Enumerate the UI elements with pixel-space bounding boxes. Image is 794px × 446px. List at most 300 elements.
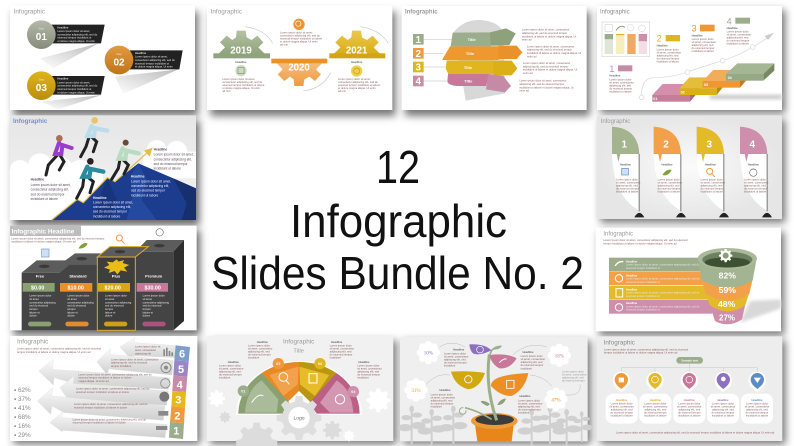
panel: slide 1 steps (10, 5, 198, 116)
flag 1 (612, 127, 644, 217)
headlines text: do eiusmod tempor (219, 373, 242, 377)
right texts: enim ad (527, 54, 537, 58)
card 5: do eiusmod tempor (746, 411, 768, 415)
flag 4: adipiscing elit, sed (744, 183, 766, 187)
card 1: Lorem ipsum dolor (611, 402, 633, 406)
card 5 (741, 394, 773, 424)
panel: slide 7 pricing (10, 226, 200, 335)
feature lists: sed do eiusmod (105, 304, 124, 308)
slide 8 title: Lorem ipsum dolor sit amet, consectetur adipiscing elit, sed do eiusmod (603, 238, 688, 242)
step 03 banner: consectetur adipiscing elit, sed do (57, 84, 98, 88)
step 3 label: do eiusmod tempor (692, 46, 715, 50)
curve and nodes (639, 33, 774, 100)
text 2021: et dolore magna aliqua. Ut enim (338, 86, 376, 90)
step 3 label: incididunt ut labore (692, 49, 714, 53)
leaf orange (491, 373, 528, 396)
flag 1: Lorem ipsum dolor (616, 177, 638, 181)
feature lists: dolore (143, 314, 151, 318)
flag 2: Headline (661, 163, 673, 167)
plant text blocks: Lorem ipsum dolor (431, 392, 453, 396)
icon: grid (235, 65, 247, 76)
mountain text lower: sed do eiusmod tempor (93, 210, 128, 214)
step 02 banner: Headline (135, 51, 147, 55)
flag 1: do eiusmod tempor (616, 186, 639, 190)
percent list: ▪ 41% (14, 405, 31, 412)
flag 4: Lorem ipsum dolor (744, 177, 766, 181)
feature lists: tempor (143, 307, 151, 311)
step 2 label: 2 (657, 34, 662, 44)
card 5: adipiscing elit, sed (746, 408, 768, 412)
step 4 label: Lorem ipsum dolor (727, 30, 749, 34)
panel: slide 4 staircase (597, 6, 785, 113)
plant text blocks: sit amet, consectetur (562, 373, 587, 377)
plant text blocks: adipiscing elit, sed (562, 376, 584, 380)
headlines text: do eiusmod tempor (330, 353, 353, 357)
plant text blocks: sit amet, consectetur (431, 395, 455, 399)
arrow text: eiusmod tempor incididunt ut labore et dolore (73, 421, 126, 425)
step 02 banner: et dolore magna aliqua. Ut enim (135, 65, 173, 69)
headlines text: sit amet, consectetur (219, 367, 244, 371)
flag 3: adipiscing elit, sed (701, 183, 723, 187)
text 2020: et dolore magna aliqua. Ut enim (280, 39, 318, 43)
flag 1: 1 (622, 139, 628, 150)
step 02 banner (105, 46, 183, 74)
org connector (621, 364, 757, 373)
slide 8 title (603, 231, 688, 245)
pricing icons (42, 229, 163, 257)
arrow text: adipiscing elit (135, 351, 151, 355)
climber text top right: Headline (154, 148, 167, 152)
gear 2019: 2019 (230, 45, 252, 56)
plant text blocks: Lorem ipsum dolor (444, 351, 466, 355)
step 03 banner: et dolore magna aliqua. Ut enim (57, 90, 96, 94)
feature lists: sed do eiusmod (29, 304, 49, 308)
text 2021: Lorem ipsum dolor sit amet, (338, 77, 371, 81)
card 2: incididunt ut labore (644, 414, 667, 418)
central title: Infographic (290, 195, 507, 247)
right texts: incididunt ut labore et dolore magna aliqua. Ut (523, 68, 577, 72)
percent list: ▪ 16% (14, 423, 31, 430)
climber text left: Headline (31, 178, 44, 182)
plant text blocks: do eiusmod tempor (431, 401, 454, 405)
card 3: Headline (684, 398, 695, 402)
row 1 green: Title (468, 37, 477, 42)
text 2019: et dolore magna aliqua. Ut enim (222, 86, 261, 90)
pin 2 (646, 372, 664, 392)
slide 12 title: tempor incididunt ut labore et dolore magna aliqua. Ut enim ad (604, 351, 678, 355)
arrow text: Lorem ipsum dolor sit amet, consectetur adipiscing elit, sed do (78, 372, 152, 376)
card 2 (639, 394, 671, 424)
plant text blocks: Headline (519, 394, 531, 398)
feature lists: Lorem ipsum dolor (29, 294, 51, 298)
step 3 label: Headline (692, 33, 703, 37)
climber text top right (154, 148, 194, 171)
block 04: 04 (728, 76, 733, 80)
plant text blocks: Headline (522, 350, 534, 354)
headlines text: incididunt (357, 376, 369, 380)
flag 3: sit amet, consectetur (701, 180, 725, 184)
right texts: incididunt ut labore et dolore magna aliqua. Ut (527, 51, 581, 55)
card 2: adipiscing elit, sed (644, 408, 667, 412)
bottom-right quadrant slides (398, 228, 786, 446)
feature lists: sed do eiusmod (67, 304, 87, 308)
price column Free: Free (36, 274, 45, 279)
feature lists: dolore (29, 314, 37, 318)
plant text blocks: Headline (439, 388, 451, 392)
arrow text: eiusmod tempor incididunt ut labore et dolore (76, 390, 130, 394)
mountain text upper (131, 175, 171, 197)
percent list: ▪ 68% (14, 414, 31, 421)
headlines text: Headline (228, 360, 239, 364)
text 2020: Lorem ipsum dolor sit amet, (280, 30, 313, 34)
slide 3 title: Infographic (405, 10, 438, 16)
band 3 gold: eiusmod tempor incididunt ut (626, 294, 660, 298)
panel: slide 9 arrows (10, 336, 201, 444)
feature lists: dolore (105, 314, 113, 318)
feature lists: tempor (105, 307, 113, 311)
right texts (519, 28, 581, 93)
panel: slide 5 climbers (10, 115, 199, 225)
arrow text: tempor incididunt (111, 364, 131, 368)
headlines text: adipiscing elit, sed (219, 370, 241, 374)
climber text left: incididunt ut labore (31, 197, 58, 201)
step 02 banner: Step (116, 52, 122, 56)
feature lists: consectetur adipiscing (143, 300, 169, 304)
slide 9 title (17, 338, 102, 354)
text 2021: ad min (338, 89, 346, 93)
block 03: 03 (704, 83, 708, 87)
number column: 2 (174, 410, 180, 422)
block 01: 01 (653, 97, 657, 101)
number column: 1 (173, 425, 179, 437)
sample pill (676, 357, 703, 364)
step 02 banner: 02 (113, 57, 125, 68)
connector curves (426, 343, 580, 395)
climber text top right: incididunt ut labore (154, 167, 181, 171)
pin 4 (715, 372, 732, 392)
arrow text (73, 345, 161, 425)
right texts: Lorem ipsum dolor sit amet, consectetur (522, 28, 569, 32)
icon table (602, 22, 650, 57)
step 4 label: 4 (727, 16, 732, 26)
step 4 label (727, 16, 751, 46)
headlines text: Lorem ipsum dolor (248, 344, 270, 348)
card 1 (606, 394, 638, 424)
row 3 yellow (413, 60, 517, 75)
plant text blocks: do eiusmod tempor (518, 407, 541, 411)
plant text blocks: adipiscing elit, sed (521, 360, 543, 364)
headlines text: incididunt (330, 356, 341, 360)
flag 2: do eiusmod tempor (658, 186, 681, 190)
step 4 label: adipiscing elit, sed (727, 36, 749, 40)
band 1 green: eiusmod tempor incididunt ut (626, 266, 660, 270)
top-left quadrant slides (10, 5, 396, 225)
block 01 (652, 84, 700, 102)
card 5: sit amet, consectetur (745, 405, 769, 409)
mountain text lower: consectetur adipiscing elit, (93, 205, 131, 209)
headlines text: Headline (331, 340, 343, 344)
flag 1: incididunt ut labore (616, 189, 639, 193)
step 03 banner: Step (39, 78, 45, 82)
feature lists: Lorem ipsum dolor (67, 294, 89, 298)
mountain text lower: Headline (93, 196, 107, 200)
feature lists: sit amet (29, 297, 39, 301)
right texts: adipiscing elit, sed do eiusmod tempor (523, 64, 568, 68)
right texts: enim ad (523, 71, 533, 75)
plant text blocks: incididunt (444, 364, 455, 368)
flag 3: 3 (707, 139, 713, 150)
feature lists: consectetur adipiscing (105, 300, 132, 304)
bottom-left quadrant slides (10, 226, 397, 446)
price column Premium (135, 240, 184, 330)
flag 1: adipiscing elit, sed (616, 183, 638, 187)
text 2021 (338, 60, 381, 93)
row 1 green: 1 (416, 35, 422, 46)
plant text blocks: sit amet, consectetur (444, 354, 469, 358)
plant text blocks: Headline (453, 347, 465, 351)
number badges: 03 (318, 362, 322, 366)
background plants (398, 406, 593, 446)
step 01 banner: consectetur adipiscing elit, sed do (57, 32, 98, 36)
headlines text: adipiscing elit, sed (248, 350, 270, 354)
step 1 label: 1 (609, 64, 614, 74)
card 3: do eiusmod tempor (678, 411, 701, 415)
flower 31% (404, 378, 428, 402)
text 2019: eiusmod tempor incididunt ut labore (222, 83, 265, 87)
band 3 gold: Lorem ipsum dolor sit amet, consectetur adipiscing elit, sed do (626, 291, 700, 295)
step 3 label (692, 24, 716, 53)
headlines text: Headline (358, 360, 370, 364)
feature lists: tempor (67, 307, 76, 311)
text 2019: consectetur adipiscing elit, sed do (222, 80, 263, 84)
arrow text: eiusmod tempor incididunt ut labore et dolore (74, 405, 128, 409)
leaf purple (469, 344, 491, 354)
feature lists: consectetur adipiscing (29, 300, 56, 304)
step 2 label: sit amet, consectetur (657, 50, 681, 54)
card 3: incididunt ut labore (678, 414, 701, 418)
gear 2020: 2020 (288, 63, 310, 74)
step 01 banner (27, 20, 105, 49)
funnel cup: 59% (719, 285, 736, 295)
price column Premium: Premium (145, 274, 163, 279)
card 5: Lorem ipsum dolor (746, 402, 768, 406)
price column Standard: Standard (69, 274, 87, 279)
number column: 4 (177, 379, 184, 391)
card 4: Headline (717, 398, 729, 402)
text 2019: Lorem ipsum dolor sit amet, (222, 77, 255, 81)
funnel cup: 48% (718, 299, 736, 309)
flag 1: sit amet, consectetur (616, 180, 641, 184)
mountain text upper: consectetur adipiscing elit, (131, 184, 169, 188)
price column Plus highlighted (97, 247, 148, 330)
flower 10%: 10% (424, 352, 433, 357)
row 3 yellow: 3 (416, 63, 422, 74)
plant text blocks: adipiscing elit, sed (444, 357, 466, 361)
headlines text: incididunt (219, 376, 230, 380)
logo gear (277, 396, 321, 440)
price column Standard: $10.00 (68, 285, 84, 291)
flag 3: Lorem ipsum dolor (701, 177, 723, 181)
step 1 label: Lorem ipsum dolor (609, 77, 631, 81)
icon: search (293, 19, 305, 30)
step 2 label: Headline (657, 44, 668, 48)
slide 12 title (604, 339, 689, 355)
feature lists: sit amet (105, 297, 115, 301)
plant text blocks: incididunt (521, 366, 532, 370)
flag 3: incididunt ut labore (701, 189, 723, 193)
band 4 pink: eiusmod tempor incididunt ut (626, 308, 660, 312)
card 3 (673, 394, 705, 424)
feature lists: sit amet (143, 297, 152, 301)
step 03 banner (27, 71, 105, 100)
right texts: adipiscing elit, sed do eiusmod tempor (527, 48, 572, 52)
slide 2 title: Infographic (211, 8, 242, 15)
gear 2021 (329, 31, 385, 58)
mountain text upper: incididunt ut labore (131, 193, 158, 197)
step 02 banner: eiusmod tempor incididunt ut (135, 61, 169, 65)
price column Standard (60, 253, 112, 330)
segment 03 gold (299, 362, 336, 404)
climber text top right: consectetur adipiscing elit, (154, 157, 192, 161)
card 4 (707, 394, 739, 424)
text 2019: ad min (222, 89, 231, 93)
feature lists: labore et (143, 310, 153, 314)
step 2 label: incididunt ut labore (657, 59, 679, 63)
percent list: ▪ 29% (14, 432, 31, 439)
step 03 banner: eiusmod tempor incididunt ut (57, 87, 92, 91)
card 3: Lorem ipsum dolor (678, 402, 700, 406)
feature lists: labore et (29, 310, 40, 314)
card 5: incididunt ut labore (746, 414, 769, 418)
card 4: Lorem ipsum dolor (712, 402, 734, 406)
step 01 banner: Headline (57, 25, 69, 29)
right texts: Lorem ipsum dolor sit amet, consectetur (519, 79, 567, 83)
slide 7 title: Infographic Headline (12, 228, 75, 235)
pin 3 (681, 372, 698, 392)
step 03 banner: Lorem ipsum dolor sit amet, (57, 80, 90, 84)
step 03 banner: 03 (36, 83, 47, 94)
flag 3: Headline (705, 163, 716, 167)
sample pill: Sample text (681, 359, 698, 363)
plant text blocks: adipiscing elit, sed (431, 398, 453, 402)
clouds (10, 140, 196, 220)
headlines text: Lorem ipsum dolor (357, 364, 379, 368)
headlines text (219, 340, 382, 380)
plant text blocks: Lorem ipsum dolor (562, 370, 584, 374)
band 1 green: Headline (626, 259, 638, 263)
flag 2: sit amet, consectetur (658, 180, 682, 184)
flag 2: incididunt ut labore (658, 189, 680, 193)
flag 2: Lorem ipsum dolor (658, 177, 680, 181)
step 01 banner: et dolore magna aliqua. Ut enim (57, 39, 96, 43)
headlines text: do eiusmod tempor (248, 353, 271, 357)
gear 2021: 2021 (346, 45, 368, 56)
number badges (238, 358, 359, 397)
card 5: Headline (751, 398, 763, 402)
percent list: ▪ 37% (14, 396, 31, 403)
segment 01 green (238, 373, 289, 414)
step 01 banner: eiusmod tempor incididunt ut (57, 36, 92, 40)
arrow text: amet, consectetur (135, 348, 156, 352)
feature lists: sit amet (67, 297, 77, 301)
step 02 banner: consectetur adipiscing elit, sed do (135, 58, 175, 62)
flag 4: sit amet, consectetur (744, 180, 769, 184)
arrow text: Lorem ipsum dolor sit amet, consectetur adipiscing elit, sed do (74, 402, 148, 406)
band 2 orange (609, 272, 704, 285)
flag 2: 2 (663, 139, 669, 150)
slide 12 footer text: Lorem ipsum dolor sit amet, consectetur adipiscing elit, sed do eiusmod tempor incididunt ut labore et dolore magna aliqua. Ut enim ad (616, 431, 775, 435)
step 1 label: Headline (609, 74, 621, 78)
flag 4 (740, 127, 772, 217)
band 1 green: Lorem ipsum dolor sit amet, consectetur adipiscing elit, sed do (626, 263, 700, 267)
flag 4: do eiusmod tempor (744, 186, 767, 190)
gear 2019 (213, 31, 270, 58)
slide 10 title: Infographic (283, 339, 314, 346)
plant text blocks: sit amet, consectetur (518, 401, 543, 405)
rising arrow (52, 148, 153, 220)
background gears (219, 412, 342, 446)
step 3 label: sit amet, consectetur (692, 40, 716, 44)
stem and small leaves (459, 349, 506, 420)
number column: 6 (179, 349, 185, 361)
panel: slide 2 gears timeline (207, 5, 396, 116)
text 2021: consectetur adipiscing elit, sed do (338, 80, 378, 84)
step 2 label: Lorem ipsum dolor (657, 47, 679, 51)
feature lists: labore et (67, 310, 78, 314)
price column Free (22, 260, 75, 330)
arrow text: Lorem ipsum dolor sit amet, consectetur adipiscing elit, sed do (73, 417, 147, 421)
step 3 label: Lorem ipsum dolor (692, 37, 714, 41)
mountain (52, 163, 196, 220)
central title: 12 (376, 141, 420, 193)
flower 18%: 18% (555, 354, 564, 359)
funnel shadow (740, 299, 781, 323)
semicircle base (236, 361, 362, 415)
band 2 orange: Lorem ipsum dolor sit amet, consectetur adipiscing elit, sed do (626, 277, 700, 281)
number badges: 01 (241, 389, 245, 393)
headlines text: sit amet, consectetur (357, 367, 382, 371)
feature lists: labore et (105, 310, 116, 314)
headlines text: Lorem ipsum dolor (330, 344, 352, 348)
plant text blocks: incididunt (431, 405, 442, 409)
row 1 green (413, 28, 516, 46)
segment icons (252, 373, 345, 404)
number column (169, 345, 190, 439)
text 2021: eiusmod tempor incididunt ut labore (338, 83, 381, 87)
text 2021: Headline (351, 60, 363, 64)
step 2 label: adipiscing elit, sed (657, 53, 679, 57)
card 4: adipiscing elit, sed (712, 408, 734, 412)
icon: clock (351, 65, 362, 77)
card 1: sit amet, consectetur (609, 405, 634, 409)
mountain text lower: Lorem ipsum dolor sit amet, (93, 200, 133, 204)
step 3 label: adipiscing elit, sed (692, 43, 714, 47)
plant text blocks (431, 347, 587, 415)
plant text blocks: sit amet, consectetur (521, 357, 545, 361)
step 02 banner: Lorem ipsum dolor sit amet, (135, 55, 168, 59)
band 3 gold (609, 286, 709, 300)
headlines text: sit amet, consectetur (248, 347, 273, 351)
headlines text: adipiscing elit, sed (357, 370, 380, 374)
step 1 label: incididunt ut labore (609, 89, 632, 93)
card 2: Lorem ipsum dolor (644, 402, 666, 406)
plant text blocks: Lorem ipsum dolor (518, 398, 540, 402)
feature lists: sed do eiusmod (143, 304, 162, 308)
flower 18% (548, 344, 571, 367)
slide 1 title: Infographic (14, 8, 45, 15)
card 2: Headline (650, 398, 661, 402)
arrow text: eiusmod tempor incididunt ut labore et dolore (78, 376, 132, 380)
